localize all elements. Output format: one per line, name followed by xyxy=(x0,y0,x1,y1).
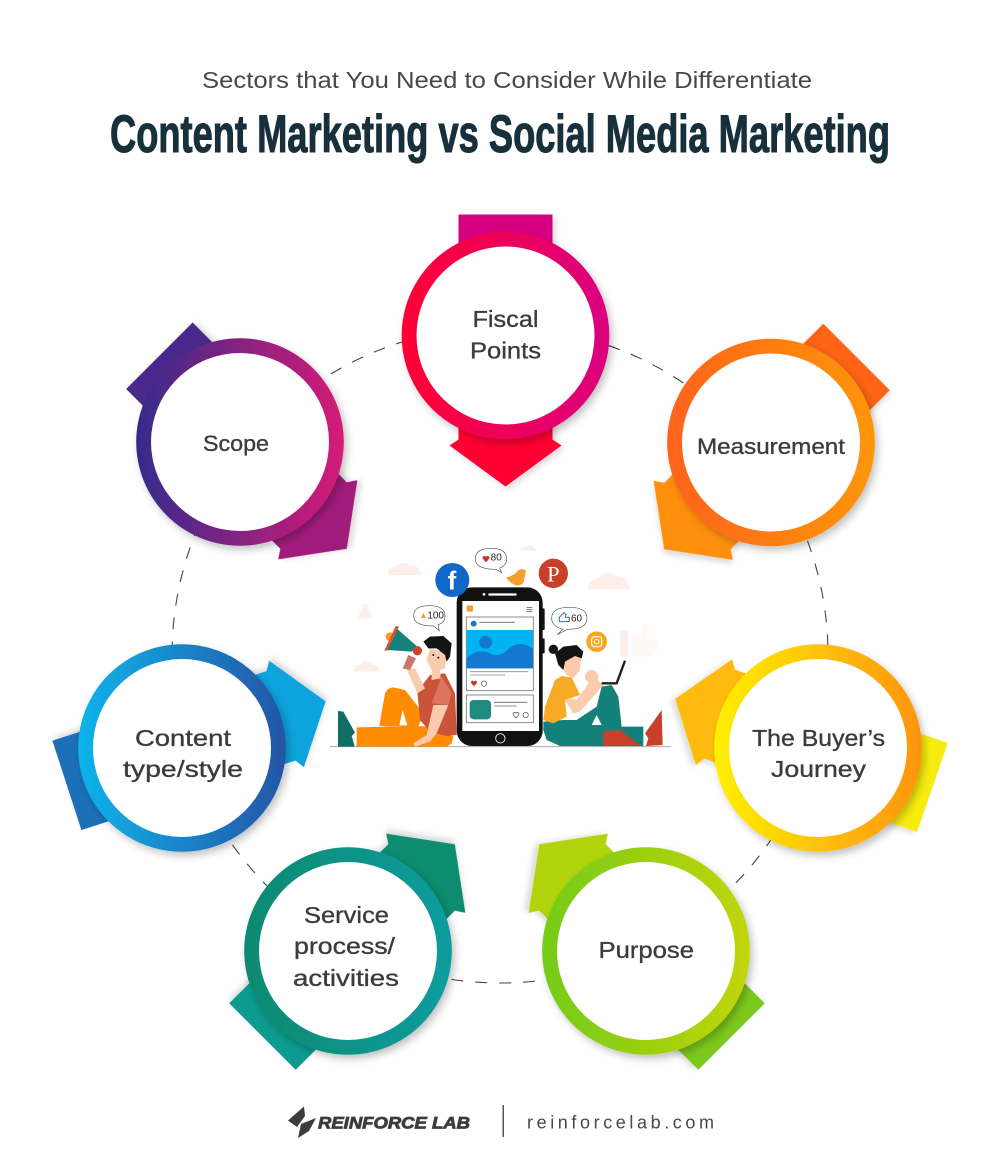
label: Fiscal Points: Fiscal xyxy=(472,306,538,332)
icon: Pinterest xyxy=(539,559,568,588)
man xyxy=(338,626,457,747)
speech bubble: 100 likes: 100 xyxy=(427,611,444,622)
arrow: Content type/style xyxy=(50,648,343,839)
speech bubble: 80 likes xyxy=(475,548,507,573)
ground line xyxy=(330,745,671,748)
label: Service process/activities: activities xyxy=(293,965,399,991)
speech bubble: 60 likes xyxy=(552,607,587,635)
node: The Buyer's Journey xyxy=(657,644,951,852)
ring: Measurement xyxy=(667,339,875,546)
label: Service process/activities xyxy=(293,902,399,991)
arrow: The Buyer's Journey xyxy=(657,646,951,840)
label: Service process/activities: process/ xyxy=(294,933,396,959)
label: The Buyer's Journey xyxy=(752,725,885,782)
label: Content type/style: Content xyxy=(135,725,232,751)
arrow: Service process/activities xyxy=(223,805,494,1076)
logo wordmark: REINFORCE LAB xyxy=(318,1114,470,1132)
central illustration: social media phone with two people xyxy=(330,545,671,747)
icon: Instagram xyxy=(586,631,607,652)
icon: Facebook: f xyxy=(448,566,457,596)
arrow: Purpose xyxy=(500,805,771,1076)
website: reinforcelab.com xyxy=(527,1112,714,1132)
background clouds xyxy=(353,545,658,672)
woman xyxy=(543,645,663,746)
subtitle: Sectors that You Need to Consider While Differentiate xyxy=(202,67,812,93)
label: The Buyer's Journey: The Buyer’s xyxy=(752,725,885,751)
ring: Purpose xyxy=(542,847,750,1055)
arrow: Fiscal Points xyxy=(450,214,562,486)
speech bubble: 80 likes: 80 xyxy=(491,553,502,564)
node: Content type/style xyxy=(50,644,343,852)
arrow: Measurement xyxy=(625,317,896,589)
icon: Facebook xyxy=(435,563,469,597)
ring: The Buyer's Journey xyxy=(714,644,922,852)
node: Scope xyxy=(117,319,386,588)
node: Fiscal Points xyxy=(402,214,609,486)
label: Fiscal Points: Points xyxy=(470,338,541,364)
divider xyxy=(502,1105,504,1137)
label: Measurement: Measurement xyxy=(697,434,845,459)
speech bubble: 60 likes: 60 xyxy=(571,614,583,625)
arrow: Scope xyxy=(117,319,386,588)
icon: Pinterest: P xyxy=(547,562,560,587)
footer brand xyxy=(288,1105,714,1138)
label: Content type/style: type/style xyxy=(123,756,243,782)
label: Purpose: Purpose xyxy=(598,937,694,963)
label: Content type/style xyxy=(123,725,243,782)
logo mark xyxy=(288,1106,316,1138)
ring: Scope xyxy=(136,338,344,546)
label: The Buyer's Journey: Journey xyxy=(771,756,866,782)
ring: Content type/style xyxy=(78,644,286,852)
label: Service process/activities: Service xyxy=(304,902,389,928)
node: Service process/activities xyxy=(223,805,494,1076)
dashed connector ring xyxy=(172,327,828,983)
node: Measurement xyxy=(625,317,896,589)
icon: bird xyxy=(506,569,526,586)
node: Purpose xyxy=(500,805,771,1076)
speech bubble: 100 likes xyxy=(414,606,445,631)
phone xyxy=(457,587,545,746)
ring: Fiscal Points xyxy=(402,232,609,439)
label: Fiscal Points xyxy=(470,306,541,364)
ring: Service process/activities xyxy=(244,847,452,1055)
label: Scope: Scope xyxy=(203,431,269,456)
